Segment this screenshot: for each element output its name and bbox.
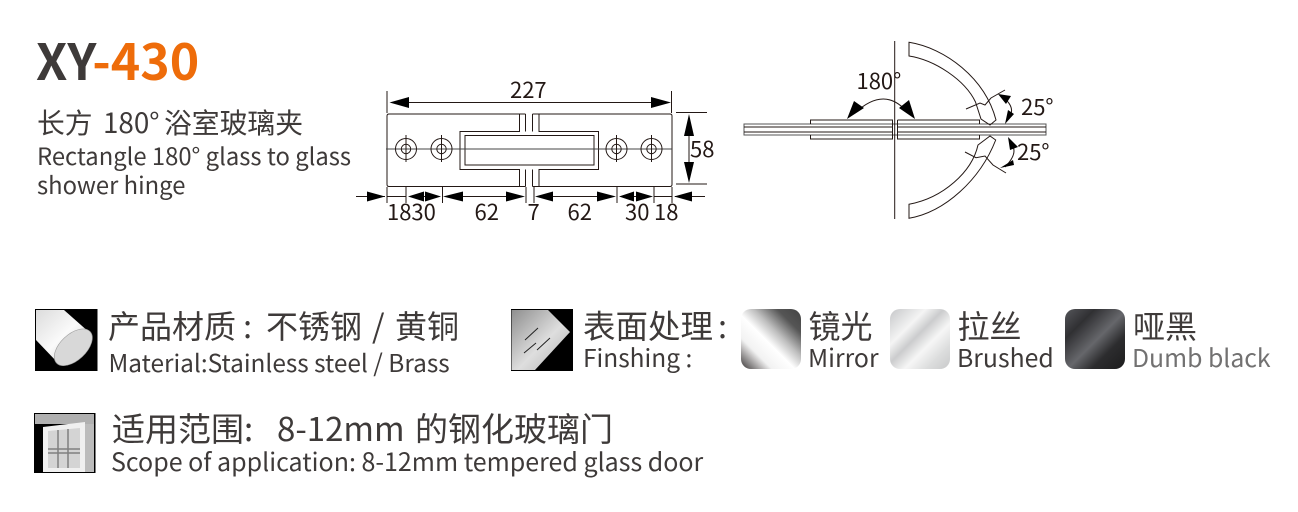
swatch: brushed: [890, 309, 950, 369]
bottom dimension chain: 62: [474, 195, 499, 227]
swatch: mirror: [741, 309, 801, 369]
material chinese label: 黄铜: [395, 302, 459, 348]
lower door arc: [909, 136, 996, 218]
lower 25 degree arrow: 25°: [1017, 135, 1050, 167]
dumb black label: 哑黑: [1133, 302, 1197, 348]
front dimension drawing: [356, 73, 714, 227]
application english label: Scope of application: 8-12mm tempered glass door: [111, 443, 704, 479]
title: XY-430: [36, 23, 199, 95]
icon: door: [34, 413, 96, 473]
hinge plate outline: [386, 114, 672, 186]
upper 25 degree arrow: [998, 90, 1054, 124]
material chinese label: 不锈钢: [266, 302, 362, 348]
opening angle drawing: [744, 41, 1054, 219]
width dimension 227: [387, 73, 672, 113]
material chinese label: /: [372, 302, 385, 348]
chinese product name: 180°: [103, 102, 160, 142]
brushed label: [957, 302, 1054, 375]
bottom dimension chain: 62: [568, 195, 592, 227]
application chinese label: 的钢化玻璃门: [415, 403, 613, 451]
180 degree arrow: [847, 64, 915, 119]
material english label: Material:Stainless steel / Brass: [108, 345, 450, 380]
height dimension 58: [676, 112, 714, 184]
width dimension 227: 227: [510, 73, 547, 105]
application row: [34, 403, 704, 479]
upper 25 degree arrow: 25°: [1021, 90, 1054, 122]
application chinese label: 适用范围:: [112, 403, 253, 451]
chinese product name: 浴室玻璃夹: [164, 102, 303, 142]
finishing chinese label: :: [718, 301, 727, 348]
product name block: [37, 102, 351, 201]
bottom dimension chain: 30: [625, 195, 649, 227]
angle leader lines: [965, 90, 1006, 173]
bottom dimension chain: 1830: [387, 195, 436, 227]
icon: glass sheet: [511, 309, 573, 371]
bottom dimension chain: 7: [528, 195, 540, 227]
glass panels and clamp plates: [744, 120, 1046, 139]
english product name line 2: shower hinge: [37, 166, 185, 201]
brushed label: Brushed: [957, 339, 1054, 375]
180 degree arrow: 180°: [856, 64, 901, 96]
mirror label: Mirror: [808, 339, 879, 375]
pivot line: [894, 41, 896, 219]
bottom dimension chain: [356, 187, 705, 227]
swatch: dumb black: [1065, 309, 1125, 369]
bottom dimension chain: 18: [654, 195, 678, 227]
icon: metal cylinder: [35, 309, 99, 372]
material row: [35, 302, 459, 380]
upper door arc: [909, 42, 996, 125]
height dimension 58: 58: [690, 132, 714, 164]
lower 25 degree arrow: [1000, 135, 1050, 168]
english product name line 1: Rectangle 180° glass to glass: [37, 137, 351, 172]
dumb black label: [1132, 302, 1271, 375]
mounting holes: [396, 135, 662, 162]
finishing row: [511, 301, 1271, 375]
chinese product name: 长方: [37, 102, 93, 142]
mirror label: [808, 302, 879, 375]
mirror label: 镜光: [808, 302, 873, 348]
brushed label: 拉丝: [958, 302, 1022, 348]
finishing english label: Finshing :: [583, 340, 692, 375]
material chinese label: 产品材质 :: [108, 302, 252, 348]
application chinese label: 8-12mm: [277, 403, 405, 451]
finishing chinese label: 表面处理: [583, 301, 713, 348]
dumb black label: Dumb black: [1132, 339, 1271, 375]
